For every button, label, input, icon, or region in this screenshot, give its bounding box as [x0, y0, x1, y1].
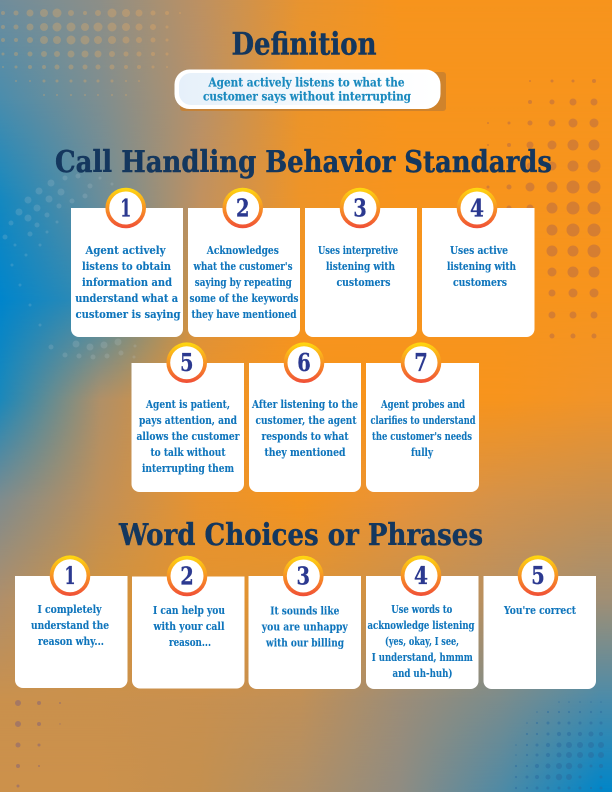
phrase card 4: 4: [414, 561, 428, 590]
standard card 5: to talk without: [150, 445, 226, 459]
dot pattern: bottom left: [18, 703, 60, 786]
standard card 5: [132, 342, 244, 492]
phrase card 3: It sounds like: [270, 604, 339, 618]
dot pattern: bottom right: [516, 702, 601, 788]
definition callout: [174, 70, 446, 111]
standard card 3: [305, 188, 417, 337]
standard card 7: fully: [411, 445, 433, 459]
dot pattern: top left: [3, 13, 180, 95]
standard card 4: [422, 188, 534, 337]
standard card 1: listens to obtain: [82, 259, 172, 273]
phrase card 4: and uh-huh): [392, 666, 452, 680]
standard card 7: [366, 342, 479, 492]
standard card 5: allows the customer: [136, 429, 240, 443]
phrase card 3: 3: [297, 562, 310, 590]
phrase card 1: 1: [64, 561, 76, 590]
standard card 6: 6: [297, 348, 311, 377]
phrase card 4: acknowledge listening: [368, 618, 474, 632]
phrase card 1: reason why...: [38, 634, 104, 648]
standard card 7: Agent probes and: [380, 397, 465, 411]
phrase card 1: I completely: [38, 602, 102, 616]
standard card 2: [188, 188, 300, 337]
standard card 2: what the customer's: [193, 259, 292, 273]
standard card 6: they mentioned: [264, 445, 346, 459]
standard card 3: listening with: [326, 259, 395, 273]
standard card 4: Uses active: [450, 243, 508, 257]
standard card 1: [71, 188, 183, 337]
heading: Word Choices or Phrases: Word Choices or Phrases: [118, 518, 483, 553]
standard card 4: listening with: [447, 259, 516, 273]
standard card 3: customers: [336, 275, 390, 289]
phrase card 5: You're correct: [503, 603, 577, 617]
standard card 5: Agent is patient,: [145, 397, 230, 411]
standard card 5: pays attention, and: [139, 413, 237, 427]
phrase card 4: (yes, okay, I see,: [385, 634, 459, 648]
phrase card 3: you are unhappy: [261, 620, 348, 634]
phrase card 3: with our billing: [265, 636, 344, 650]
standard card 7: clarifies to understand: [370, 413, 476, 427]
standard card 6: [249, 342, 361, 492]
phrase card 5: 5: [531, 561, 545, 590]
dot pattern: right side: [488, 81, 594, 336]
phrase card 2: 2: [180, 562, 194, 590]
standard card 7: the customer's needs: [372, 429, 472, 443]
standard card 7: 7: [414, 348, 428, 377]
standard card 2: some of the keywords: [190, 291, 298, 305]
dot pattern: left arcs: [5, 176, 135, 357]
standard card 1: understand what a: [75, 291, 179, 305]
phrase card 4: [366, 555, 478, 689]
standard card 5: 5: [180, 348, 193, 377]
phrase card 1: understand the: [31, 618, 109, 632]
phrase card 1: [15, 555, 128, 688]
definition callout: Agent actively listens to what the: [208, 75, 405, 90]
standard card 3: 3: [353, 194, 367, 222]
standard card 4: 4: [470, 194, 484, 222]
standard card 1: 1: [120, 194, 131, 222]
standard card 1: Agent actively: [85, 243, 166, 257]
standard card 2: they have mentioned: [192, 307, 296, 321]
phrase card 2: [132, 556, 244, 688]
standard card 6: responds to what: [262, 429, 349, 443]
phrase card 4: Use words to: [391, 602, 453, 616]
phrase card 5: [484, 555, 596, 689]
standard card 1: customer is saying: [76, 307, 180, 321]
title: Definition: Definition: [232, 26, 376, 62]
standard card 1: information and: [82, 275, 172, 289]
standard card 6: customer, the agent: [256, 413, 357, 427]
standard card 2: Acknowledges: [206, 243, 279, 257]
phrase card 3: [248, 556, 361, 689]
phrase card 4: I understand, hmmm: [372, 650, 473, 664]
phrase card 2: reason...: [169, 635, 211, 649]
standard card 5: interrupting them: [142, 461, 234, 475]
standard card 4: customers: [453, 275, 507, 289]
standard card 2: saying by repeating: [195, 275, 292, 289]
phrase card 2: with your call: [153, 619, 225, 633]
definition callout: customer says without interrupting: [203, 89, 411, 104]
standard card 2: 2: [236, 194, 249, 222]
phrase card 2: I can help you: [153, 603, 225, 617]
standard card 3: Uses interpretive: [318, 243, 398, 257]
standard card 6: After listening to the: [251, 397, 358, 411]
